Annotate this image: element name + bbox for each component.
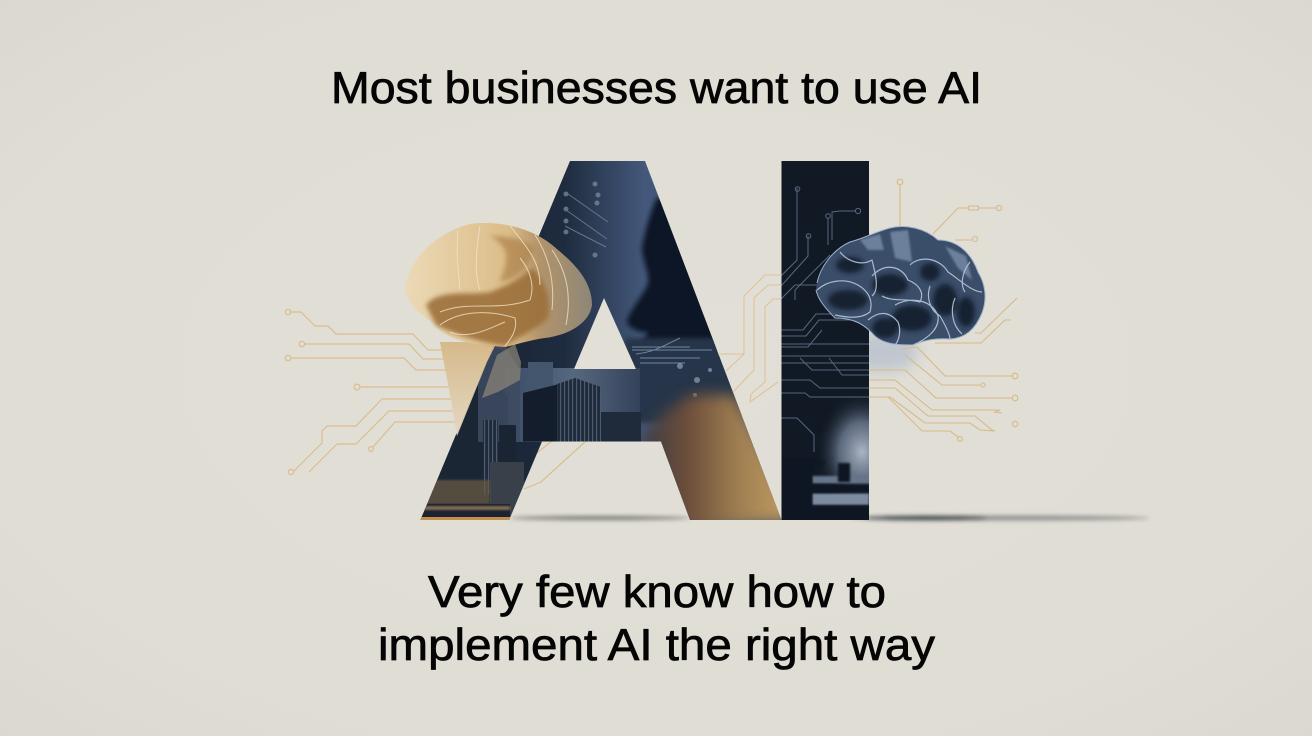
brain folds	[440, 226, 568, 346]
city buildings	[420, 345, 641, 520]
sky behind city	[519, 368, 640, 442]
brain dark band	[426, 268, 549, 346]
digital dust	[625, 338, 740, 423]
face silhouette	[624, 195, 716, 346]
subtitle line one: Very few know how to	[428, 568, 886, 617]
blue brain	[816, 226, 985, 345]
cone of gold particles below brain	[440, 342, 497, 436]
middle circuit lines between A and I	[718, 275, 781, 402]
dust sparkles	[677, 363, 712, 397]
gold lower right	[641, 386, 782, 520]
grey stipple trail	[482, 344, 521, 398]
silhouette of machine	[810, 461, 869, 507]
dark brain shading	[817, 230, 982, 345]
letter A with photo collage	[420, 161, 800, 530]
subtitle line two: implement AI the right way	[378, 621, 936, 670]
brain gyri lines	[817, 252, 982, 345]
A base gradient	[420, 161, 782, 520]
light glow	[822, 401, 869, 497]
gold brain	[405, 223, 592, 347]
bright bands	[812, 476, 869, 484]
brain upper dark fold	[490, 236, 535, 282]
mist below blue brain	[869, 331, 921, 376]
I base	[782, 161, 869, 520]
left circuit lines	[285, 309, 586, 489]
letter I with circuits	[782, 161, 869, 520]
data dots and lines	[564, 182, 608, 257]
circuit traces	[781, 187, 869, 452]
title top: Most businesses want to use AI	[331, 64, 982, 113]
brain highlights	[860, 230, 972, 280]
right circuit lines	[869, 179, 1018, 441]
ground shadow under letters	[510, 516, 1150, 520]
city lights	[420, 480, 490, 504]
